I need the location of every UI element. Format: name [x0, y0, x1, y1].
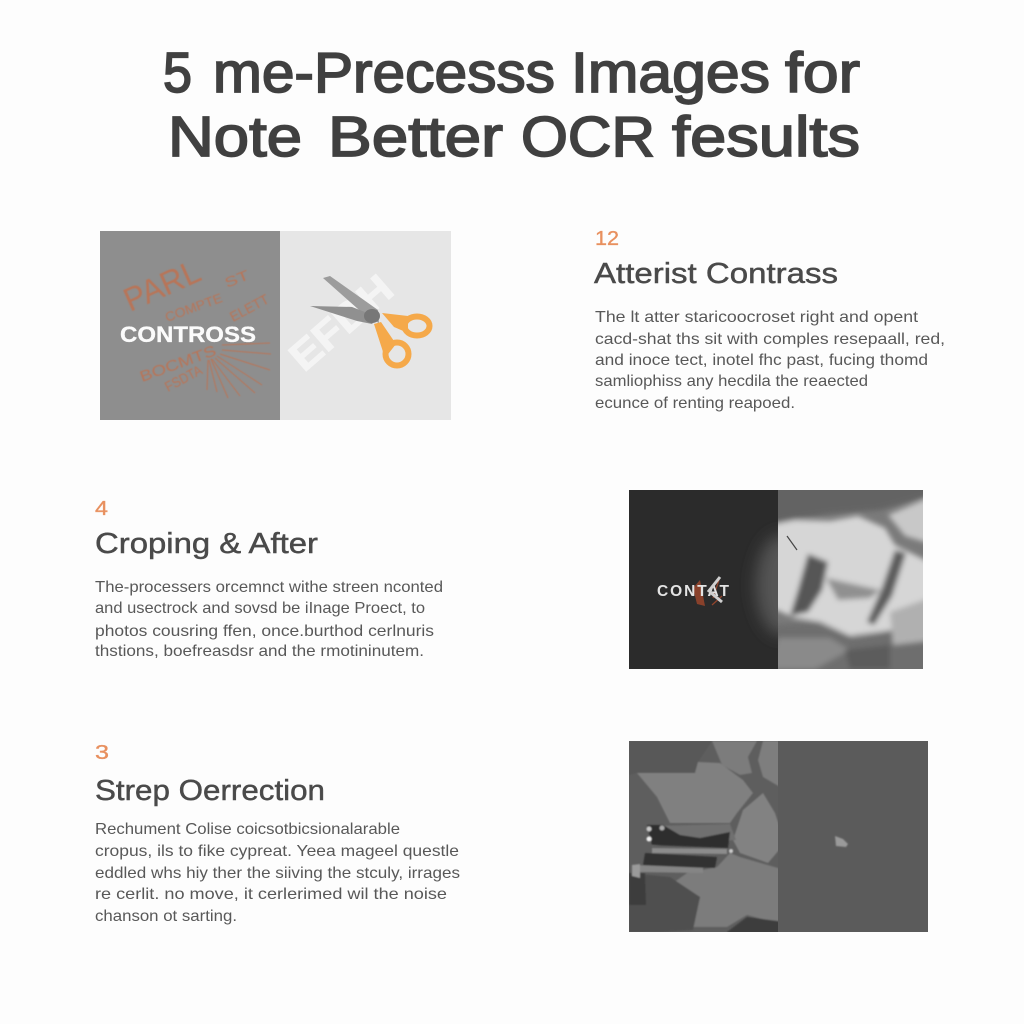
heading: Croping & After: Croping & After [95, 528, 319, 560]
step number 12: 12 [595, 228, 619, 250]
map landmass [629, 741, 712, 775]
panel: grey map-like image [629, 741, 928, 935]
title: for [785, 41, 860, 105]
blurred photo [778, 490, 923, 669]
body text 2 [95, 579, 443, 660]
body text 1: cacd-shat ths sit with comples resepaall, red, [595, 331, 945, 348]
body text 1: and inoce tect, inotel fhc past, fucing thomd [595, 352, 928, 369]
heading: Strep Oerrection: Strep Oerrection [95, 775, 325, 807]
small light speck [835, 836, 848, 847]
icon: scissors [310, 276, 430, 366]
title: Images [571, 41, 770, 105]
body text 3: re cerlit. no move, it cerlerimed wil the noise [95, 886, 447, 903]
heading: Atterist Contrass: Atterist Contrass [594, 258, 838, 290]
noisy orange background text and rays: BOCMTS [138, 342, 219, 386]
title: Note [168, 105, 302, 169]
dark text bands [647, 825, 730, 848]
title: fesults [672, 105, 860, 169]
noisy orange background text and rays: PARL [118, 252, 206, 318]
contact label: CONTAT [657, 583, 730, 600]
section 2 text [95, 498, 443, 660]
contact label [657, 577, 730, 606]
panel: contrast and scissors image [100, 231, 451, 420]
faint white rotated letters: EFDH [281, 267, 402, 380]
noisy orange background text and rays [123, 264, 272, 398]
body text 2: photos cousring ffen, once.burthod cerlnuris [95, 623, 434, 640]
body text 3: chanson ot sarting. [95, 908, 237, 925]
step number 3: 3 [95, 742, 109, 764]
body text 2: and usectrock and sovsd be iInage Proect, to [95, 600, 425, 617]
noisy orange background text and rays: ELETT [227, 291, 272, 325]
body text 1: ecunce of renting reapoed. [595, 395, 795, 412]
body text 1: samliophiss any hecdila the reaected [595, 373, 868, 390]
title: Better [328, 105, 503, 169]
contrast label: CONTROSS [120, 322, 256, 347]
body text 3: eddled whs hiy ther the siiving the stculy, irrages [95, 865, 460, 882]
body text 1 [595, 309, 945, 412]
title [163, 41, 860, 169]
section 3 text [95, 742, 460, 925]
noisy orange background text and rays: COMPTE [163, 290, 225, 325]
noisy orange background text and rays: FSDTA [162, 361, 205, 395]
noisy orange background text and rays: ST [222, 266, 252, 291]
title: OCR [521, 105, 655, 169]
step number 4: 4 [95, 498, 108, 520]
section 1 text [594, 228, 945, 412]
body text 3: cropus, ils to fike cypreat. Yeea mageel questle [95, 843, 459, 860]
title: me-Precesss [213, 41, 555, 105]
panel: dark contact image with blurred photo [629, 490, 923, 669]
body text 2: thstions, boefreasdsr and the rmotininutem. [95, 643, 424, 660]
body text 3: Rechument Colise coicsotbicsionalarable [95, 821, 400, 838]
body text 2: The-processers orcemnct withe streen nconted [95, 579, 443, 596]
title: 5 [163, 41, 192, 105]
body text 3 [95, 821, 460, 925]
body text 1: The lt atter staricoocroset right and opent [595, 309, 919, 326]
